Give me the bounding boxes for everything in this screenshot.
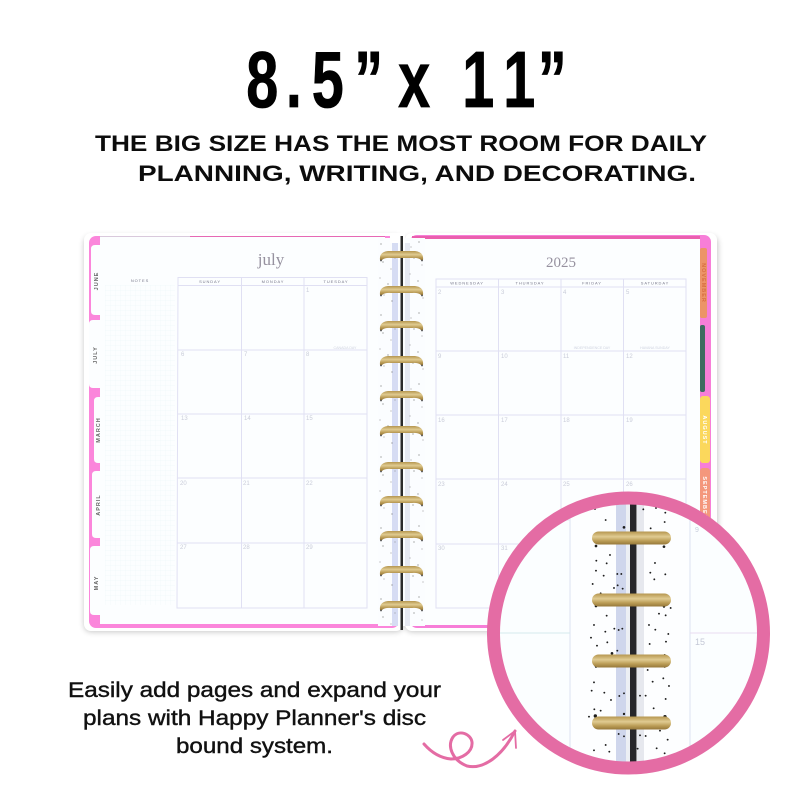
text block: disc bound system: Easily add pages and expand your (68, 679, 441, 702)
right tabs: NOVEMBER (700, 263, 706, 303)
left calendar grid: SUNDAY (199, 279, 221, 284)
left calendar grid (177, 277, 367, 608)
left tabs: JULY (93, 346, 99, 364)
left calendar grid: 6 (181, 352, 185, 358)
right tabs (700, 248, 710, 530)
title: ” (538, 35, 567, 124)
title: ” (354, 35, 383, 124)
right calendar grid: 17 (501, 418, 508, 424)
subtitle (95, 131, 707, 186)
right tabs: SEPTEMBER (701, 476, 707, 520)
arrow (424, 731, 516, 767)
right calendar grid: FRIDAY (582, 280, 602, 286)
title: 1 (462, 35, 494, 124)
right calendar grid: WEDNESDAY (450, 280, 484, 286)
notes area (105, 278, 175, 605)
left calendar grid: 15 (306, 416, 313, 422)
right calendar grid: 5 (626, 290, 630, 296)
right calendar grid: 16 (438, 418, 445, 424)
right calendar grid: INDEPENDENCE DAY (574, 346, 611, 350)
binding strip (378, 233, 425, 630)
callout: magnified disc binding: 15 (695, 637, 705, 647)
right calendar grid: 4 (563, 290, 567, 296)
left calendar grid: 7 (244, 352, 248, 358)
right calendar grid: 31 (501, 546, 508, 552)
left tabs (89, 245, 102, 615)
text block: disc bound system: bound system. (176, 735, 333, 758)
left calendar grid: 20 (180, 481, 187, 487)
text block: disc bound system (68, 679, 441, 758)
right calendar grid: 25 (563, 482, 570, 488)
right calendar grid: HAVANA SUNDAY (640, 346, 670, 350)
left calendar grid: TUESDAY (324, 279, 348, 284)
right calendar grid: 23 (438, 482, 445, 488)
left calendar grid: 22 (306, 481, 313, 487)
subtitle: PLANNING, WRITING, AND DECORATING. (138, 161, 696, 186)
right calendar grid: 30 (438, 546, 445, 552)
left calendar grid: 29 (306, 545, 313, 551)
right calendar grid: 26 (626, 482, 633, 488)
right calendar grid: 3 (501, 290, 505, 296)
right page (410, 239, 700, 625)
right calendar grid: 9 (438, 354, 442, 360)
left calendar grid: 27 (180, 545, 187, 551)
text block: disc bound system: plans with Happy Planner's disc (83, 707, 426, 730)
planner cover (84, 233, 718, 632)
right calendar grid: 24 (501, 482, 508, 488)
right calendar grid: THURSDAY (516, 280, 544, 286)
right calendar grid: 18 (563, 418, 570, 424)
left tabs: MARCH (96, 417, 102, 443)
right calendar grid: 10 (501, 354, 508, 360)
left tabs: JUNE (94, 272, 100, 290)
callout: magnified disc binding (494, 490, 764, 780)
callout ring (494, 498, 764, 768)
panel: open planner (84, 233, 718, 632)
left calendar grid: 8 (306, 352, 310, 358)
left tabs: APRIL (96, 494, 102, 516)
right calendar grid: SATURDAY (641, 280, 669, 286)
title: 5 (312, 35, 344, 124)
title: . (286, 35, 302, 124)
right tabs: AUGUST (701, 415, 707, 445)
left heading: july: july (257, 250, 285, 269)
right calendar grid: 19 (626, 418, 633, 424)
title: x (398, 35, 430, 124)
right calendar grid: 2 (438, 290, 442, 296)
left calendar grid: 1 (306, 288, 310, 294)
left tabs: MAY (94, 576, 100, 590)
gold disc rings (380, 251, 423, 611)
notes area: NOTES (131, 278, 149, 283)
subtitle: THE BIG SIZE HAS THE MOST ROOM FOR DAILY (95, 131, 707, 156)
left page (100, 237, 385, 624)
title: 8 (246, 35, 278, 124)
right calendar grid (436, 279, 686, 608)
left calendar grid: 14 (244, 416, 251, 422)
callout: magnified disc binding: 9 (695, 527, 699, 534)
right calendar grid: 11 (563, 354, 570, 360)
left calendar grid: 21 (243, 481, 250, 487)
left calendar grid: MONDAY (262, 279, 284, 284)
right calendar grid: 12 (626, 354, 633, 360)
left calendar grid: 13 (181, 416, 188, 422)
left calendar grid: CANADA DAY (334, 346, 357, 350)
left calendar grid: 28 (243, 545, 250, 551)
title: 1 (503, 35, 535, 124)
right heading: 2025: 2025 (546, 255, 576, 271)
